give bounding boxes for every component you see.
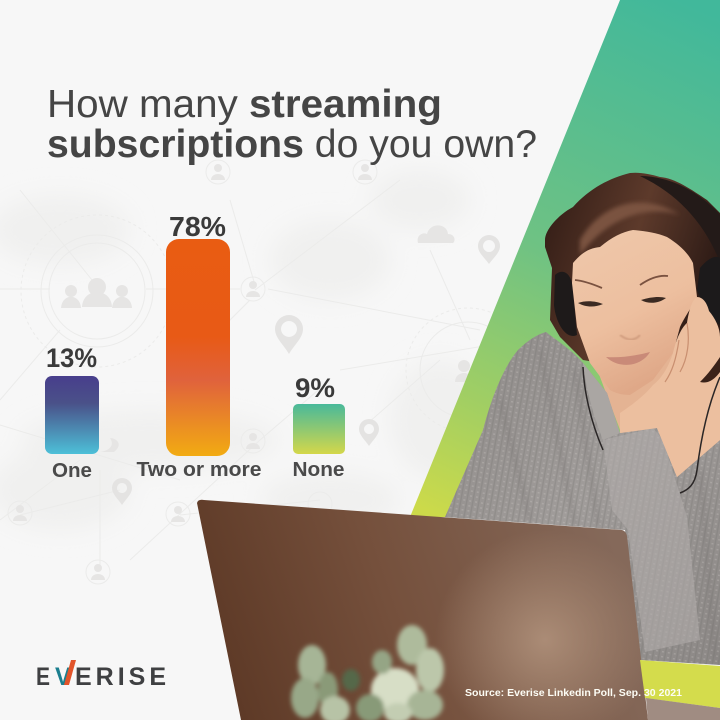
headphone ear cups xyxy=(554,272,577,336)
plant blurred foreground xyxy=(291,625,444,720)
headphone cables xyxy=(583,367,720,493)
laptop xyxy=(197,500,648,720)
chest and neck skin xyxy=(590,340,720,478)
bar: Two or more xyxy=(136,211,262,481)
logo: Everise xyxy=(36,660,166,691)
face xyxy=(572,230,697,395)
hair back xyxy=(545,173,720,385)
hand xyxy=(620,297,720,477)
bar: None xyxy=(292,373,345,481)
logo: Everise: E xyxy=(36,663,50,691)
bar: One: One xyxy=(52,460,92,482)
green diagonal band xyxy=(410,0,720,517)
sweater xyxy=(445,332,720,665)
bar: None: 9% xyxy=(295,373,335,403)
headphone band xyxy=(640,176,720,262)
hand finger crease xyxy=(665,323,688,382)
hair strand behind hand xyxy=(700,357,720,383)
logo: Everise: V xyxy=(55,663,71,691)
source note: Source: Everise Linkedin Poll, Sep. 30 2021 xyxy=(465,688,682,699)
sweater cuff xyxy=(603,428,700,652)
bar: One xyxy=(45,343,99,482)
hair highlight xyxy=(580,203,680,255)
title: subscriptions do you own? xyxy=(47,123,537,166)
table edge xyxy=(646,698,720,720)
facial features xyxy=(575,276,668,365)
title xyxy=(47,83,537,166)
photo: woman with headphones xyxy=(445,173,720,665)
bar: Two or more: 78% xyxy=(169,211,226,242)
bar chart xyxy=(45,211,345,482)
sweater collar xyxy=(583,363,620,440)
yellow strip under sweater xyxy=(640,660,720,708)
title: How many streaming xyxy=(47,83,442,126)
logo: Everise: ERISE xyxy=(75,663,166,691)
bar: One: 13% xyxy=(46,343,97,373)
bar: None: None xyxy=(292,459,344,481)
sweater shading xyxy=(500,350,715,660)
bar: Two or more: Two or more xyxy=(136,459,262,481)
background network map pattern xyxy=(0,160,530,584)
